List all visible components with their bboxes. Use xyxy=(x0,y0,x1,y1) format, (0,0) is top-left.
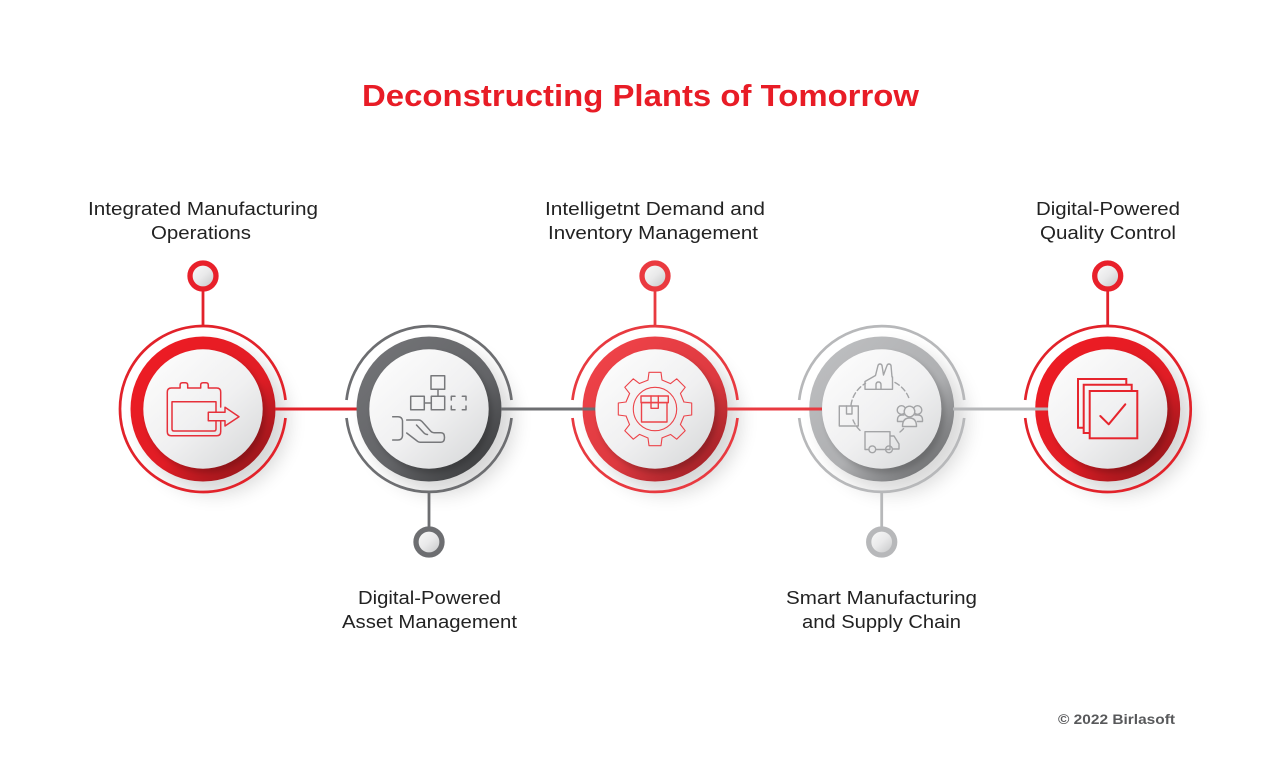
label: Integrated Manufacturing Operations: Integrated Manufacturing xyxy=(88,198,318,219)
label: Smart Manufacturing and Supply Chain: and Supply Chain xyxy=(802,611,961,632)
label: Digital-Powered Quality Control: Digital-Powered xyxy=(1036,198,1180,219)
connector: gray line 2-3 xyxy=(501,408,596,410)
node 1: integrated manufacturing xyxy=(120,263,287,493)
label: Digital-Powered Quality Control: Quality Control xyxy=(1040,222,1176,243)
label: Smart Manufacturing and Supply Chain xyxy=(786,587,977,632)
label: Smart Manufacturing and Supply Chain: Smart Manufacturing xyxy=(786,587,977,608)
title: Deconstructing Plants of Tomorrow xyxy=(362,78,920,113)
connector: light gray line 4-5 xyxy=(953,408,1036,410)
label: Integrated Manufacturing Operations xyxy=(88,198,318,243)
node 2: digital-powered asset management xyxy=(346,326,513,555)
copyright: © 2022 Birlasoft xyxy=(1058,712,1176,727)
label: Digital-Powered Asset Management: Asset Management xyxy=(342,611,517,632)
icon: supply chain cycle xyxy=(839,364,923,453)
icon: gear with box xyxy=(618,372,692,446)
icon: hand with blocks xyxy=(393,376,466,442)
icon: calendar with arrow xyxy=(167,383,239,436)
label: Intelligent Demand and Inventory Management: Inventory Management xyxy=(548,222,758,243)
connector: red line 3-4 xyxy=(727,408,822,410)
label: Digital-Powered Asset Management: Digital-Powered xyxy=(358,587,501,608)
label: Digital-Powered Asset Management xyxy=(342,587,517,632)
node 3: intelligent demand and inventory xyxy=(572,263,739,493)
label: Integrated Manufacturing Operations: Operations xyxy=(151,222,251,243)
label: Intelligent Demand and Inventory Management: Intelligetnt Demand and xyxy=(545,198,765,219)
node 4: smart manufacturing and supply chain xyxy=(799,326,966,555)
label: Digital-Powered Quality Control xyxy=(1036,198,1180,243)
connector: red line 1-2 xyxy=(275,408,358,410)
node 5: digital-powered quality control xyxy=(1025,263,1192,493)
label: Intelligent Demand and Inventory Management xyxy=(545,198,765,243)
icon: stacked pages with check xyxy=(1078,379,1137,438)
